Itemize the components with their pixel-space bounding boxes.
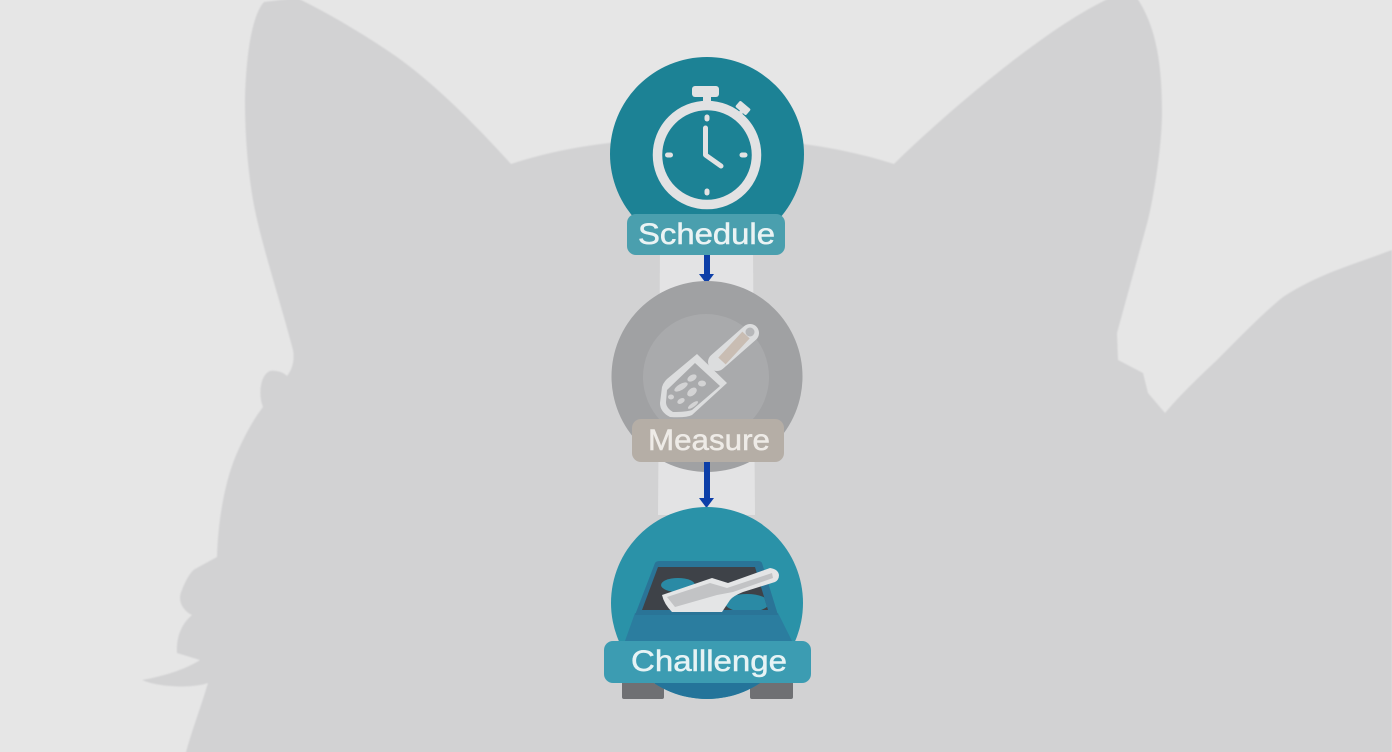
- second cat silhouette: [1100, 250, 1392, 752]
- icon: litter box: [625, 561, 792, 700]
- background: light vertical beam: [658, 250, 755, 515]
- scoop: [662, 568, 779, 612]
- label: measure: Measure: [648, 424, 770, 457]
- label: schedule: Schedule: [638, 218, 775, 251]
- teal circle: [610, 57, 804, 251]
- arrow: measure to challenge: [699, 462, 714, 508]
- icon: stopwatch: [658, 86, 756, 204]
- step 1: schedule: [610, 57, 804, 255]
- label: schedule: [627, 214, 785, 255]
- scoop grains: [668, 373, 706, 410]
- label: challenge: Challlenge: [631, 645, 787, 678]
- label: challenge: [604, 641, 811, 683]
- step 2: measure: [612, 281, 802, 472]
- label: measure: [632, 419, 784, 462]
- icon: scoop: [660, 328, 754, 417]
- grey circle: [612, 281, 802, 472]
- arrow: schedule to measure: [699, 255, 714, 284]
- icon: litter box feet: [622, 680, 793, 699]
- inner circle: [643, 314, 769, 440]
- teal circle: [611, 507, 803, 699]
- step 3: challenge: [604, 507, 811, 700]
